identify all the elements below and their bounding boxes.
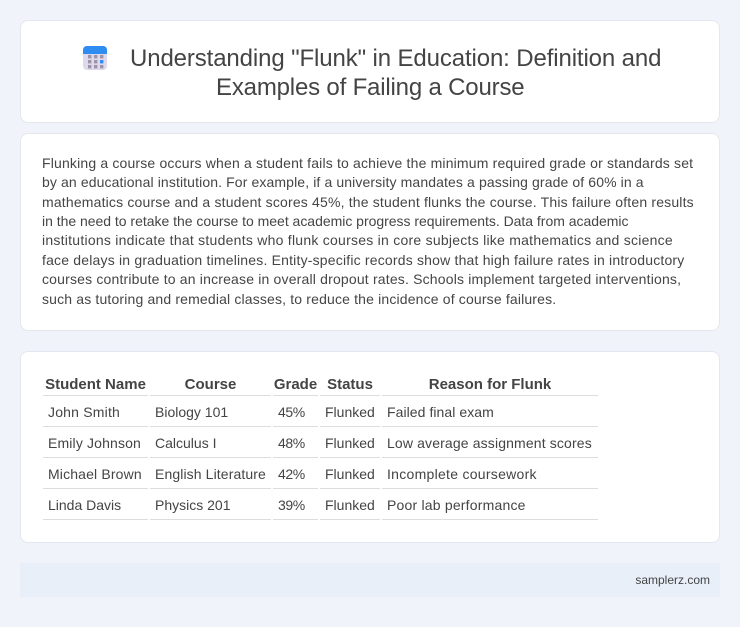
description text: institutions indicate that students who flunk courses in core subjects like mathematics and science <box>42 232 673 248</box>
row: John Smith: Biology 101 <box>155 404 228 420</box>
row: Emily Johnson <box>48 435 592 451</box>
row: Emily Johnson: Low average assignment scores <box>387 435 592 451</box>
footer text: samplerz.com <box>635 573 710 587</box>
table <box>43 376 598 520</box>
row: Linda Davis: Poor lab performance <box>387 497 526 513</box>
row: Michael Brown: Flunked <box>325 466 375 482</box>
row: Michael Brown: Incomplete coursework <box>387 466 537 482</box>
row: Linda Davis: 39% <box>278 497 305 513</box>
row: Linda Davis: Physics 201 <box>155 497 230 513</box>
row: Michael Brown: English Literature <box>155 466 266 482</box>
table header: Reason for Flunk <box>429 376 551 393</box>
description text: Flunking a course occurs when a student fails to achieve the minimum required grade or standards set <box>42 155 693 171</box>
row: Linda Davis: Flunked <box>325 497 375 513</box>
row: Michael Brown: 42% <box>278 466 305 482</box>
title: Examples of Failing a Course <box>216 74 524 101</box>
row: Emily Johnson: Emily Johnson <box>48 435 141 451</box>
row: Emily Johnson: 48% <box>278 435 305 451</box>
row: Linda Davis: Linda Davis <box>48 497 121 513</box>
row: Emily Johnson: Calculus I <box>155 435 216 451</box>
row: Linda Davis <box>48 497 526 513</box>
table header: Grade <box>274 376 317 393</box>
description text: mathematics course and a student scores 45%, the student flunks the course. This failure often results <box>42 194 694 210</box>
description text: face delays in graduation timelines. Entity-specific records show that high failure rates in introductory <box>42 252 684 268</box>
row: Michael Brown <box>48 466 537 482</box>
row: Michael Brown: Michael Brown <box>48 466 142 482</box>
row: John Smith: Flunked <box>325 404 375 420</box>
description text: courses contribute to an increase in overall dropout rates. Schools implement targeted interventions, <box>42 271 681 287</box>
description text <box>42 155 694 307</box>
row: John Smith <box>48 404 494 420</box>
row: Emily Johnson: Flunked <box>325 435 375 451</box>
icon: calendar <box>83 46 107 70</box>
table header <box>45 376 552 393</box>
row: John Smith: Failed final exam <box>387 404 494 420</box>
description text: such as tutoring and remedial classes, to reduce the incidence of course failures. <box>42 291 556 307</box>
footer bar <box>20 563 720 597</box>
description text: by an educational institution. For example, if a university mandates a passing grade of 60% in a <box>42 174 644 190</box>
title <box>130 45 661 101</box>
description text: in the need to retake the course to meet academic progress requirements. Data from academic <box>42 213 628 229</box>
panel: description <box>20 133 720 331</box>
table header: Course <box>185 376 236 393</box>
row: John Smith: 45% <box>278 404 305 420</box>
table header: Status <box>327 376 373 393</box>
row: John Smith: John Smith <box>48 404 120 420</box>
table header: Student Name <box>45 376 146 393</box>
panel: title card <box>20 20 720 123</box>
panel: table card <box>20 351 720 543</box>
title: Understanding "Flunk" in Education: Definition and <box>130 45 661 72</box>
